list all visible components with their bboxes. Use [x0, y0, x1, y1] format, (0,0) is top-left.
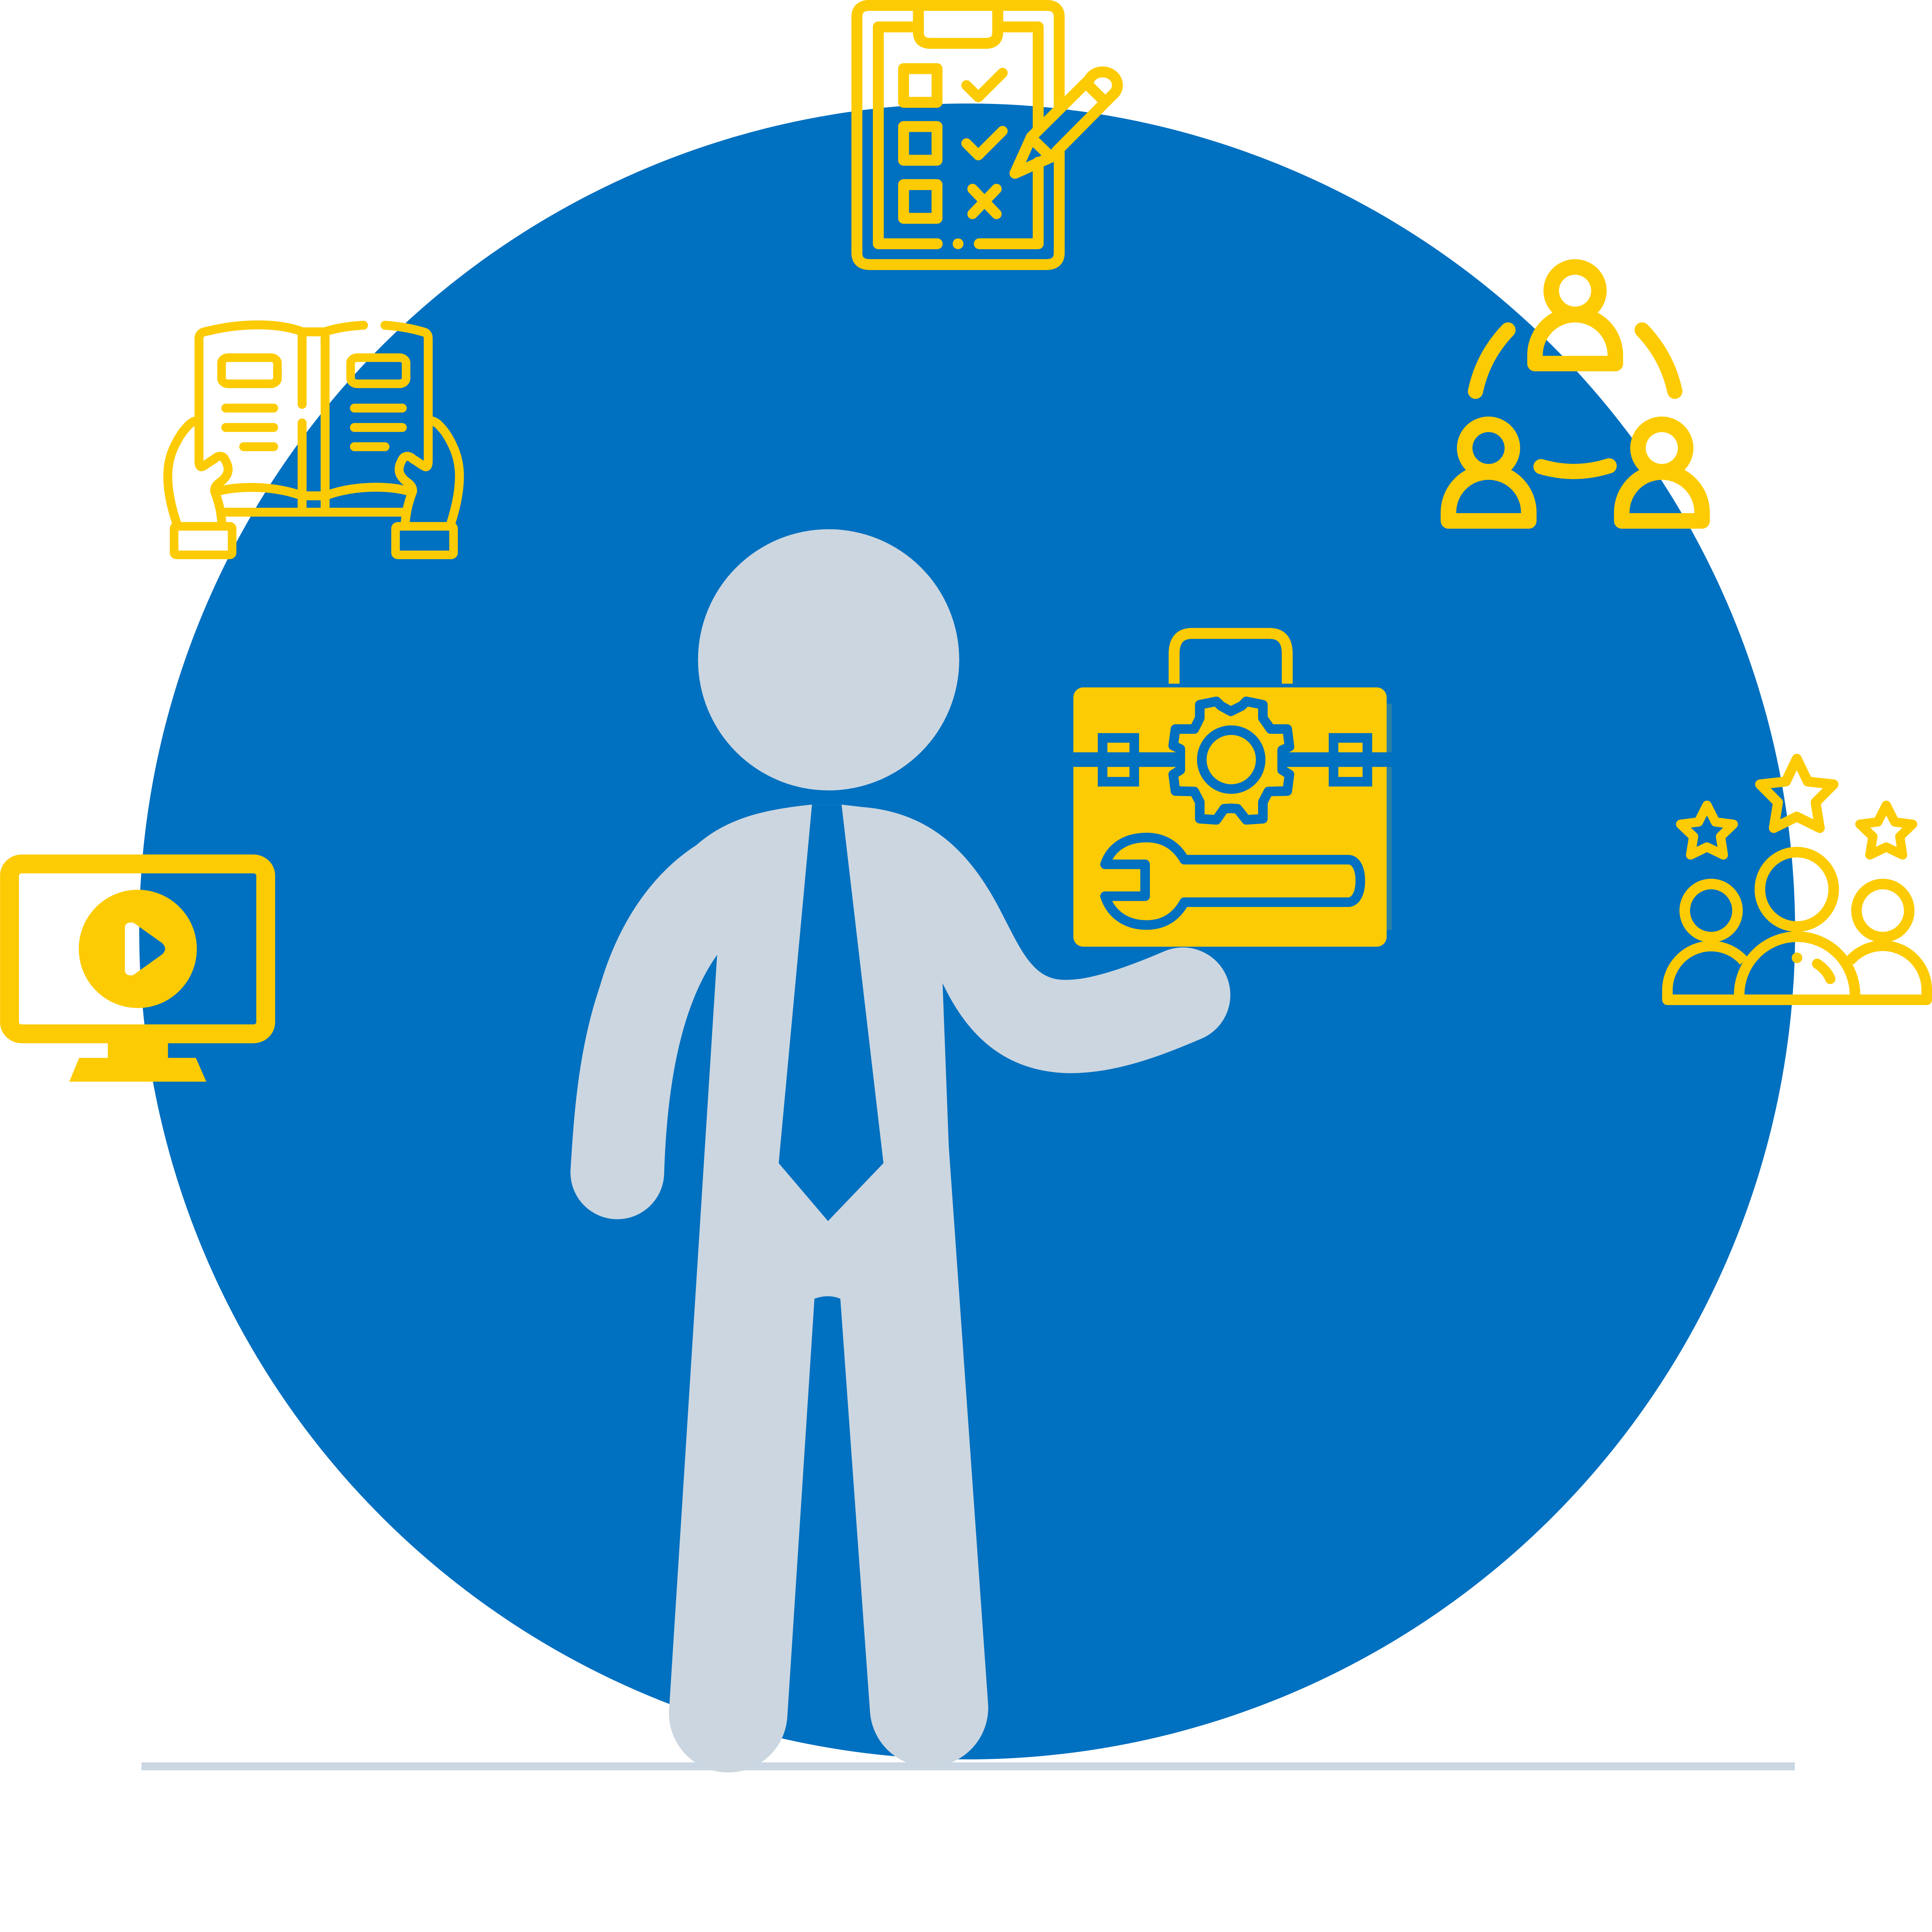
play button: [79, 890, 197, 1008]
right head: [1857, 884, 1909, 937]
spine: [302, 332, 325, 512]
checkbox 3: [903, 185, 937, 218]
clipboard outer frame: [857, 5, 1059, 265]
cross mark: [973, 189, 997, 214]
check mark 2: [966, 131, 1003, 155]
bottom right person: [1622, 424, 1702, 521]
right cuff: [396, 526, 454, 555]
right body: [1850, 946, 1927, 1000]
right star: [1860, 805, 1913, 855]
right clasp: [1333, 738, 1367, 782]
body highlight arc: [1817, 964, 1830, 979]
wrench outline: [1105, 838, 1360, 925]
top person: [1535, 267, 1615, 364]
centre body: [1739, 937, 1855, 1000]
checkbox 2: [903, 127, 937, 160]
icon: three people with stars: [1667, 759, 1927, 1000]
checkbox 1: [903, 69, 937, 102]
book top edge left: [199, 325, 364, 417]
icon: team of three connected people: [1449, 267, 1702, 521]
toolbox body: [1073, 687, 1387, 947]
clip: [918, 5, 998, 43]
ground line: [141, 1762, 1795, 1770]
blue background circle: [139, 104, 1795, 1759]
toolbox edge shadow: [1387, 704, 1392, 930]
book top edge right: [385, 325, 428, 525]
left page text lines: [226, 408, 274, 447]
right page picture box: [350, 358, 406, 384]
left body: [1667, 946, 1744, 1000]
connecting arcs: [1476, 330, 1675, 471]
icon: toolbox with gear and wrench: [1073, 633, 1392, 947]
sheet outline: [878, 27, 1038, 244]
gear outline: [1173, 701, 1289, 820]
book base line: [221, 508, 405, 517]
left clasp: [1102, 738, 1134, 782]
left thumb: [199, 417, 228, 525]
left page picture box: [221, 358, 277, 384]
sheet bottom dot: [952, 238, 963, 249]
right page text lines: [354, 408, 402, 447]
base line: [1667, 995, 1927, 1005]
icon: monitor with play button: [10, 864, 266, 1082]
centre head: [1760, 852, 1834, 927]
icon: open book held by two hands: [168, 325, 459, 555]
left star: [1680, 805, 1733, 855]
bottom left person: [1449, 424, 1529, 521]
figure: person in tie: [570, 529, 1230, 1772]
right hand: [428, 420, 459, 525]
toolbox handle: [1174, 633, 1287, 684]
toolbox latch stripe: [1073, 747, 1392, 772]
left hand: [168, 420, 199, 525]
body dot: [1792, 952, 1802, 963]
pencil: [1015, 72, 1117, 173]
figure head: [698, 529, 959, 791]
left cuff: [174, 526, 232, 555]
figure body with arms and legs: [570, 804, 1230, 1772]
icon: clipboard checklist with pencil: [857, 5, 1117, 265]
figure tie: [779, 804, 883, 1221]
lower page curves: [219, 487, 408, 496]
check mark 1: [966, 73, 1003, 97]
large star: [1760, 759, 1833, 828]
gear centre ring: [1202, 730, 1261, 789]
monitor frame: [10, 864, 266, 1034]
monitor stand: [69, 1038, 206, 1082]
left head: [1685, 884, 1738, 937]
